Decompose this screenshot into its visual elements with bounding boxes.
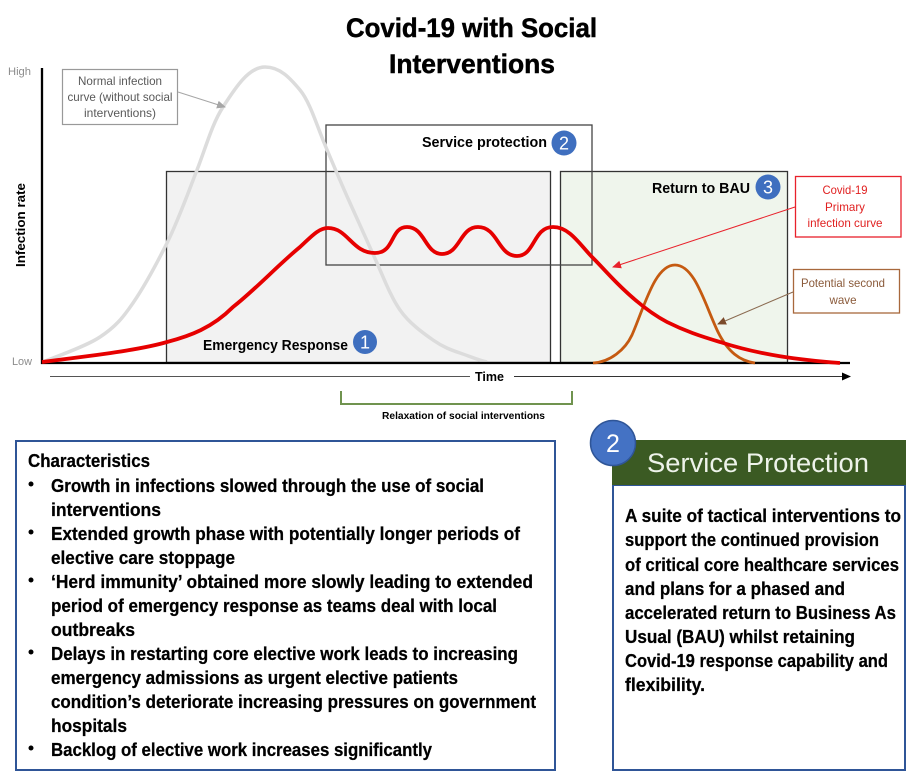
arrow: normal curve callout xyxy=(178,92,225,107)
title xyxy=(346,13,597,79)
callout: normal infection curve: Normal infection xyxy=(78,74,162,88)
bullet list: hospitals xyxy=(51,716,127,736)
description text: of critical core healthcare services xyxy=(625,555,899,575)
badge: 1 xyxy=(353,330,377,354)
axis label: low: Low xyxy=(12,356,32,368)
badge: 2: 2 xyxy=(559,134,569,154)
badge: 1: 1 xyxy=(360,332,370,352)
description text: A suite of tactical interventions to xyxy=(625,506,901,526)
bracket: relaxation of social interventions: Relaxation of social interventions xyxy=(382,410,545,422)
description text: Covid-19 response capability and xyxy=(625,651,888,671)
badge: 3 xyxy=(756,174,780,200)
panel: characteristics xyxy=(16,441,555,770)
heading: characteristics: Characteristics xyxy=(28,451,150,471)
bullet list xyxy=(28,476,536,760)
callout: covid-19 primary infection curve: Covid-19 xyxy=(822,183,868,197)
bullet list: interventions xyxy=(51,500,161,520)
callout: covid-19 primary infection curve: infection curve xyxy=(808,216,883,230)
bullet list: Extended growth phase with potentially longer periods of xyxy=(51,524,521,544)
callout: potential second wave xyxy=(794,270,900,313)
title: Covid-19 with Social xyxy=(346,13,597,43)
title: Interventions xyxy=(389,49,555,79)
label: return to BAU: Return to BAU xyxy=(652,181,750,197)
callout: potential second wave: Potential second xyxy=(801,276,885,290)
label: service protection: Service protection xyxy=(422,135,547,151)
bullet list: period of emergency response as teams deal with local xyxy=(51,596,497,616)
callout: potential second wave: wave xyxy=(829,293,857,307)
badge: header 2: 2 xyxy=(606,430,620,458)
description text: Usual (BAU) whilst retaining xyxy=(625,627,855,647)
description text: accelerated return to Business As xyxy=(625,603,896,623)
label: emergency response: Emergency Response xyxy=(203,338,348,354)
callout: normal infection curve: interventions) xyxy=(84,106,156,120)
description text: flexibility. xyxy=(625,675,705,695)
curve: covid-19 primary infection curve xyxy=(42,227,840,363)
bullet list: Backlog of elective work increases significantly xyxy=(51,740,432,760)
bullet list: Growth in infections slowed through the use of social xyxy=(51,476,484,496)
axis label: time: Time xyxy=(475,370,504,384)
curve: normal infection curve xyxy=(43,67,487,362)
bullet list: elective care stoppage xyxy=(51,548,235,568)
axes xyxy=(42,68,850,363)
description text: and plans for a phased and xyxy=(625,579,845,599)
bullet list: condition’s deteriorate increasing pressures on government xyxy=(51,692,536,712)
panel: emergency response phase xyxy=(166,172,550,362)
bullet list: outbreaks xyxy=(51,620,135,640)
header text: Service Protection xyxy=(647,448,869,478)
arrow: second wave callout xyxy=(718,292,793,324)
curve: potential second wave xyxy=(593,265,755,363)
description text: support the continued provision xyxy=(625,530,879,550)
bullet list: ‘Herd immunity’ obtained more slowly leading to extended xyxy=(51,572,533,592)
panel: return to BAU phase xyxy=(560,172,788,362)
axis label: infection rate: Infection rate xyxy=(14,183,28,267)
callout: normal infection curve: curve (without social xyxy=(68,90,172,104)
panel: service protection phase xyxy=(326,125,592,265)
badge: header 2 xyxy=(590,420,636,466)
bullet list: emergency admissions as urgent elective patients xyxy=(51,668,458,688)
axis label: high: High xyxy=(8,66,31,78)
header bar xyxy=(612,440,906,485)
arrow: covid-19 callout xyxy=(613,207,795,267)
callout: normal infection curve xyxy=(62,70,178,124)
callout: covid-19 primary infection curve: Primary xyxy=(825,200,865,214)
panel: service protection detail xyxy=(590,420,906,770)
badge: 3: 3 xyxy=(763,178,773,198)
callout: covid-19 primary infection curve xyxy=(796,176,901,237)
bullet list: Delays in restarting core elective work leads to increasing xyxy=(51,644,518,664)
description text xyxy=(625,506,901,695)
bracket: relaxation of social interventions xyxy=(341,391,572,422)
badge: 2 xyxy=(552,130,576,156)
